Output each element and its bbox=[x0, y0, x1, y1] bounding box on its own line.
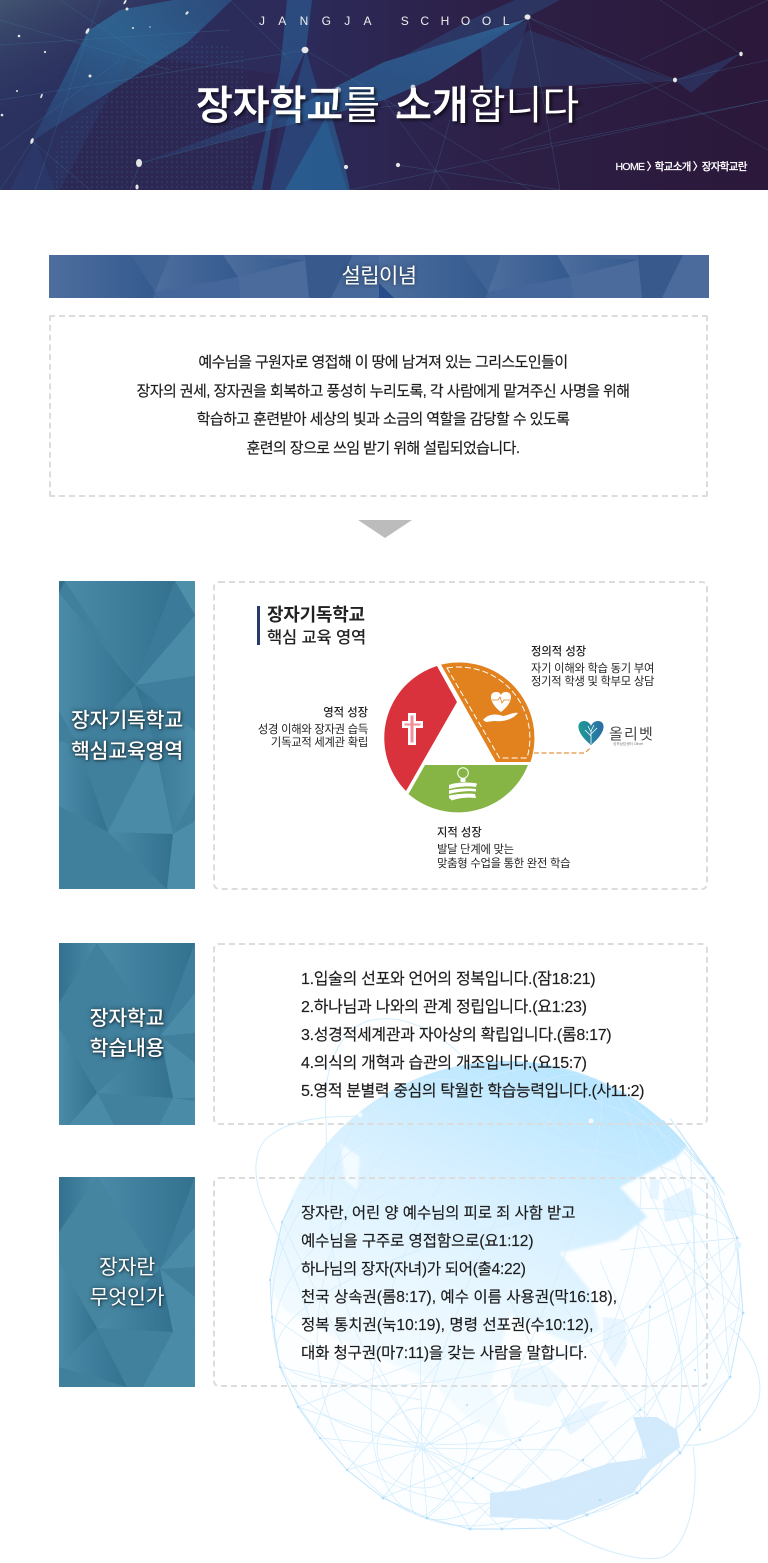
page title: 장자학교를 소개합니다 bbox=[196, 84, 579, 128]
label: intellectual growth: 맞춤형 수업을 통한 완전 학습 bbox=[437, 857, 570, 870]
logo: olivet: 올리벳 bbox=[609, 726, 654, 743]
side label facets bbox=[59, 1177, 195, 1387]
side label: learning content bbox=[59, 943, 195, 1125]
segment: emotional growth bbox=[441, 662, 534, 762]
founding philosophy text: 학습하고 훈련받아 세상의 빛과 소금의 역할을 감당할 수 있도록 bbox=[197, 411, 569, 428]
side label facets bbox=[59, 581, 195, 889]
arrow: down triangle bbox=[358, 520, 412, 538]
label: spiritual growth bbox=[258, 706, 369, 749]
breadcrumb: 〉 bbox=[693, 161, 703, 173]
definition text: 하나님의 장자(자녀)가 되어(출4:22) bbox=[301, 1261, 526, 1278]
learning content list: 3.성경적세계관과 자아상의 확립입니다.(롬8:17) bbox=[301, 1027, 611, 1044]
chart subheading: 핵심 교육 영역 bbox=[267, 628, 366, 647]
logo: olivet bbox=[578, 721, 654, 746]
school name: JANGJA SCHOOL bbox=[259, 14, 521, 28]
learning content list bbox=[301, 970, 644, 1100]
side label facets bbox=[59, 943, 195, 1125]
side label text: 장자란 bbox=[99, 1256, 155, 1279]
label: emotional growth: 정기적 학생 및 학부모 상담 bbox=[531, 675, 654, 688]
learning content list: 5.영적 분별력 중심의 탁월한 학습능력입니다.(사11:2) bbox=[301, 1083, 644, 1100]
label: emotional growth: 자기 이해와 학습 동기 부여 bbox=[531, 662, 654, 675]
header network background bbox=[0, 0, 768, 190]
logo: olivet: 성격상담센터 Olivet bbox=[613, 741, 643, 746]
banner facets bbox=[49, 255, 709, 298]
panel: core education areas bbox=[213, 581, 708, 890]
label: intellectual growth: 발달 단계에 맞는 bbox=[437, 842, 514, 856]
side label: what is jangja bbox=[59, 1177, 195, 1387]
icon: heart in hand bbox=[483, 692, 518, 722]
panel: founding philosophy bbox=[49, 315, 708, 497]
definition text: 천국 상속권(롬8:17), 예수 이름 사용권(막16:18), bbox=[301, 1289, 617, 1306]
learning content list: 4.의식의 개혁과 습관의 개조입니다.(요15:7) bbox=[301, 1055, 587, 1072]
banner heading: 설립이념 bbox=[342, 265, 416, 288]
breadcrumb: 〉 bbox=[647, 161, 657, 173]
label: spiritual growth: 기독교적 세계관 확립 bbox=[271, 736, 368, 749]
definition text: 정복 통치권(눅10:19), 명령 선포권(수10:12), bbox=[301, 1317, 593, 1334]
chart heading bar bbox=[257, 606, 260, 645]
definition text: 예수님을 구주로 영접함으로(요1:12) bbox=[301, 1233, 533, 1250]
definition text: 대화 청구권(마7:11)을 갖는 사람을 말합니다. bbox=[301, 1345, 587, 1362]
side label text: 장자학교 bbox=[90, 1007, 164, 1030]
definition text bbox=[301, 1204, 617, 1362]
panel: learning content bbox=[213, 943, 708, 1125]
label: intellectual growth bbox=[437, 826, 570, 870]
learning content list: 2.하나님과 나와의 관계 정립입니다.(요1:23) bbox=[301, 999, 587, 1016]
label: emotional growth: 정의적 성장 bbox=[531, 645, 587, 658]
founding philosophy text bbox=[136, 354, 630, 457]
side label text: 학습내용 bbox=[90, 1037, 164, 1060]
definition text: 장자란, 어린 양 예수님의 피로 죄 사함 받고 bbox=[301, 1205, 575, 1222]
founding philosophy text: 훈련의 장으로 쓰임 받기 위해 설립되었습니다. bbox=[247, 440, 519, 457]
chart: core education areas pie bbox=[257, 605, 654, 870]
panel: what is jangja bbox=[213, 1177, 708, 1387]
side label text: 무엇인가 bbox=[90, 1286, 164, 1309]
label: spiritual growth: 영적 성장 bbox=[323, 706, 369, 719]
segment: intellectual growth bbox=[408, 765, 528, 812]
header banner bbox=[0, 0, 768, 190]
founding philosophy text: 장자의 권세, 장자권을 회복하고 풍성히 누리도록, 각 사람에게 맡겨주신 사명을 위해 bbox=[136, 383, 630, 400]
globe background bbox=[255, 1018, 760, 1560]
side label text: 핵심교육영역 bbox=[71, 740, 183, 763]
label: intellectual growth: 지적 성장 bbox=[437, 826, 482, 839]
icon: books with lightbulb bbox=[449, 768, 477, 800]
label: emotional growth bbox=[531, 645, 654, 688]
founding philosophy text: 예수님을 구원자로 영접해 이 땅에 남겨져 있는 그리스도인들이 bbox=[198, 354, 568, 371]
segment: spiritual growth bbox=[384, 666, 457, 791]
side label text: 장자기독학교 bbox=[71, 709, 183, 732]
side label: core education areas bbox=[59, 581, 195, 889]
side label text bbox=[70, 708, 185, 763]
breadcrumb: HOME 학교소개 장자학교란 bbox=[616, 161, 747, 173]
label: spiritual growth: 성경 이해와 장자권 습득 bbox=[258, 722, 368, 736]
chart heading: 장자기독학교 bbox=[267, 605, 365, 625]
side label text bbox=[90, 1255, 166, 1309]
section banner: 설립이념 bbox=[49, 255, 709, 298]
learning content list: 1.입술의 선포와 언어의 정복입니다.(잠18:21) bbox=[301, 971, 595, 988]
side label text bbox=[88, 1006, 166, 1060]
icon: cross bbox=[402, 713, 423, 745]
connector: dashed line to logo bbox=[534, 748, 590, 753]
